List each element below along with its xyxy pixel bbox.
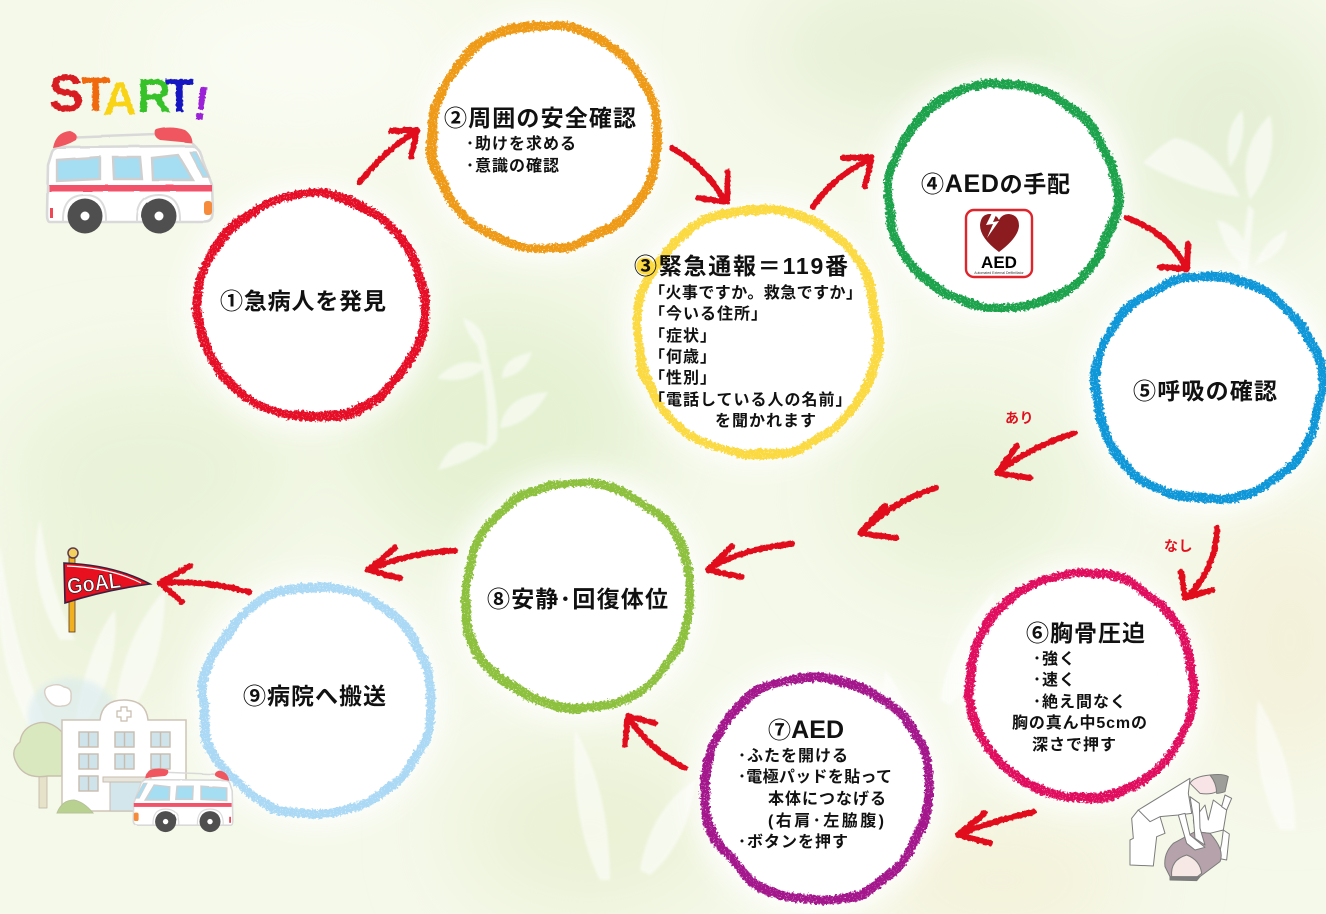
step 7 text: ･電極パッドを貼って [738,767,893,786]
start lettering: ! [190,77,213,132]
plant: upper right [1143,110,1287,270]
step 2 text: ･意識の確認 [466,156,560,175]
step 2 text [444,105,636,175]
arrow 1 to 2 [360,130,417,182]
patient foot [1222,795,1232,810]
arrow ari 3 [708,544,792,577]
patient hair [1170,877,1200,881]
arrow 8 to 9 [368,548,455,578]
plant: lower middle [574,590,1295,880]
step 3 text: 「電話している人の名前」 [649,390,853,409]
rescuer hair [1210,774,1228,793]
ring 9 [203,586,431,814]
step 3 text: 「今いる住所」 [649,304,768,323]
step 3 text: ③緊急通報＝119番 [634,253,848,279]
rescuer far arm [1190,797,1205,845]
step 7 text: ･ふたを開ける [738,747,849,765]
step 8 label: ⑧安静･回復体位 [487,586,668,612]
step 6 text: 胸の真ん中5cmの [1012,714,1148,732]
step 3 text: 「火事ですか。救急ですか」 [649,283,863,302]
patient shirt [1165,832,1221,877]
step 3 text: 「何歳」 [649,347,717,366]
patient arm [1218,830,1229,860]
hospital illustration [14,678,186,813]
step 3 text [634,253,863,430]
icon: AED [966,210,1032,277]
start lettering [48,64,213,132]
start lettering: T [165,69,194,122]
plant: left bottom [0,520,165,730]
start lettering: S [48,64,85,124]
step 6 text: ⑥胸骨圧迫 [1026,620,1145,646]
ring 2 [432,26,658,248]
patient legs [1193,800,1227,833]
ring 5 [1095,276,1321,500]
step 7 text: ⑦AED [768,716,844,744]
icon: ambulance goal [133,768,233,832]
ring 1 [198,194,424,418]
step 4 label: ④AEDの手配 [921,170,1070,198]
label: ari: あり [1005,410,1034,426]
rescuer shirt [1138,778,1192,822]
ring 3 [637,209,879,455]
arrow 7 to 8 [625,716,685,768]
arrow ari 1 [997,433,1075,478]
ring 6 [970,572,1194,798]
arrow ari 2 [860,488,936,538]
icon: AED: AED [981,253,1017,272]
step 7 text: ･ボタンを押す [738,833,849,851]
CPR illustration [1130,774,1232,881]
ring 8 [464,482,690,708]
patient head [1172,855,1202,877]
rescuer trousers [1130,810,1165,866]
start lettering: A [103,72,137,125]
step 3 text: を聞かれます [715,412,817,430]
step 7 text: 本体につなげる [768,790,887,808]
start lettering: T [81,69,110,122]
step 6 text: ･強く [1033,650,1076,668]
label: nashi: なし [1164,538,1193,554]
plant: right lower [1124,410,1195,490]
arrow 4 to 5 [1127,218,1188,269]
ring 7 [704,677,930,901]
rescuer face [1190,775,1217,794]
step 6 text [1012,620,1148,754]
step 7 text: (右肩･左脇腹) [768,811,885,830]
rescuer near arm [1178,813,1205,850]
step 3 text: 「症状」 [649,327,717,345]
step 7 text [738,716,893,851]
arrow 3 to 4 [813,157,872,207]
plant: centre [437,318,548,470]
arrow 2 to 3 [672,148,728,202]
ring 4 [888,84,1116,308]
flag goal [64,548,150,632]
arrow 9 to goal [160,566,249,602]
step 6 text: ･絶え間なく [1033,692,1127,711]
step 2 text: ･助けを求める [466,134,577,153]
flag goal: GoAL [66,568,122,599]
icon: ambulance start [47,128,213,234]
step 6 text: 深さで押す [1032,736,1117,754]
arrow nashi [1181,528,1217,598]
icon: AED: Automated External Defibrillator [974,271,1025,275]
step 2 text: ②周囲の安全確認 [444,105,636,131]
arrow 6 to 7 [958,812,1034,843]
step 1 label: ①急病人を発見 [220,288,386,314]
start lettering: R [137,69,171,122]
step 5 label: ⑤呼吸の確認 [1133,378,1277,404]
step 6 text: ･速く [1033,671,1076,689]
step 9 label: ⑨病院へ搬送 [243,683,386,709]
step 3 text: 「性別」 [649,368,717,387]
arrows [160,130,1217,843]
